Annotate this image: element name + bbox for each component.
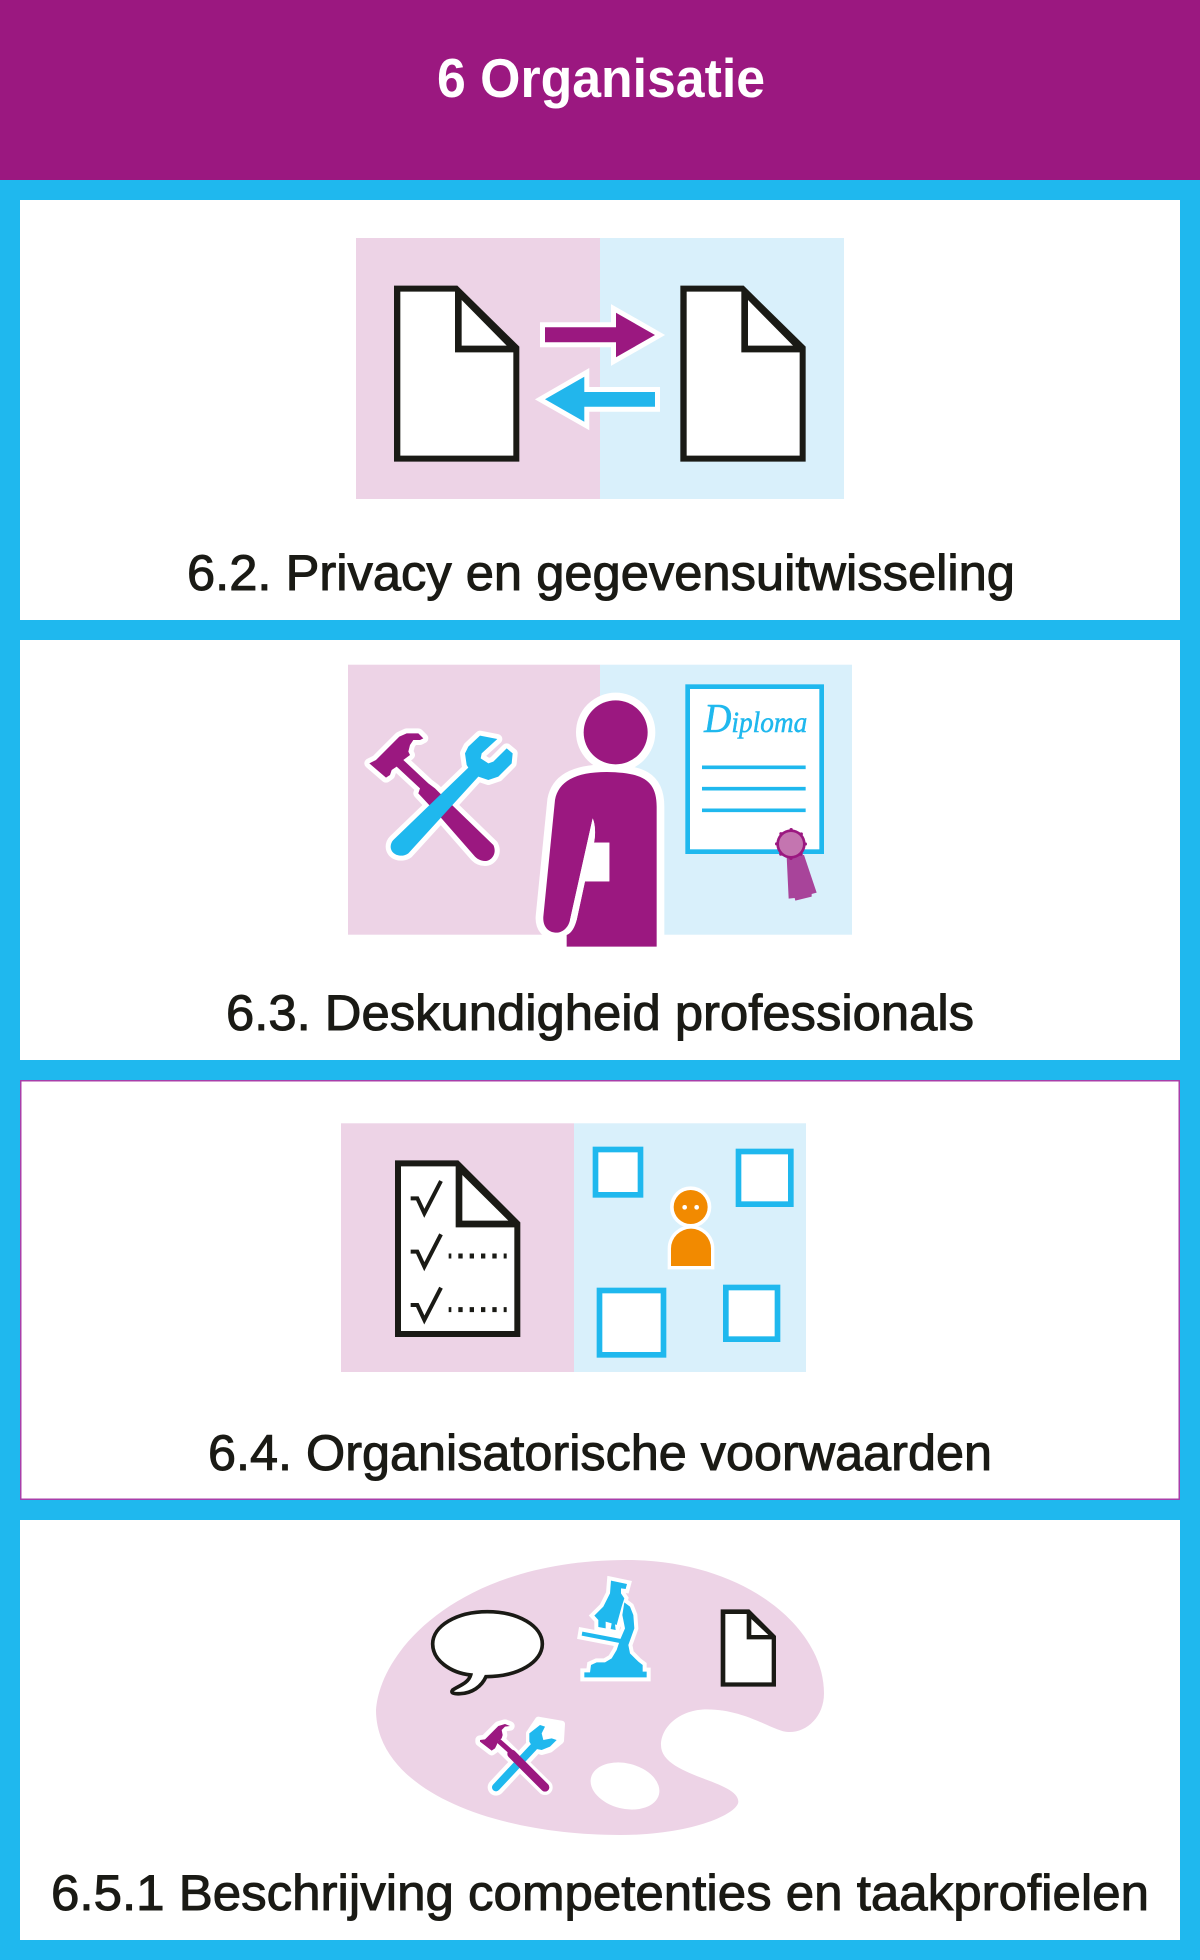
title: 6 Organisatie — [437, 47, 765, 109]
illustration: palette with icons — [376, 1560, 824, 1835]
diploma script: Diploma — [703, 696, 807, 742]
icon: small hammer and wrench — [480, 1720, 562, 1787]
hammer — [369, 733, 495, 861]
icon: checklist document — [394, 1160, 520, 1337]
heading: 6.5.1: 6.5.1 Beschrijving competenties en taakprofielen — [51, 1865, 1149, 1921]
illustration: checklist and person among squares — [340, 1123, 806, 1372]
illustration: professional with tools and diploma — [348, 665, 852, 947]
icon: left document — [394, 286, 519, 462]
title header — [0, 0, 1200, 180]
wrench — [391, 736, 513, 856]
panel: 6.2 privacy — [20, 200, 1180, 620]
icon: diploma — [688, 687, 822, 901]
icon: crossed hammer and wrench — [369, 733, 513, 861]
panel: 6.4 organisational conditions — [20, 1080, 1180, 1500]
arrow: blue to the left — [545, 377, 655, 422]
heading: 6.4: 6.4. Organisatorische voorwaarden — [208, 1425, 992, 1481]
icon: person — [543, 700, 657, 947]
panel: 6.3 professionals — [20, 640, 1180, 1060]
arrow: purple to the right — [545, 313, 655, 357]
icon: document — [721, 1609, 776, 1687]
heading: 6.3: 6.3. Deskundigheid professionals — [226, 985, 974, 1041]
icon: speech bubble — [433, 1612, 542, 1694]
illustration: document exchange — [356, 238, 844, 499]
palette — [376, 1560, 824, 1835]
icon: four squares — [595, 1149, 790, 1355]
heading: 6.2: 6.2. Privacy en gegevensuitwisseling — [187, 545, 1015, 601]
panel: 6.5.1 competencies — [20, 1520, 1180, 1940]
icon: right document — [680, 286, 806, 462]
icon: orange person — [670, 1190, 710, 1266]
icon: microscope — [582, 1581, 647, 1677]
